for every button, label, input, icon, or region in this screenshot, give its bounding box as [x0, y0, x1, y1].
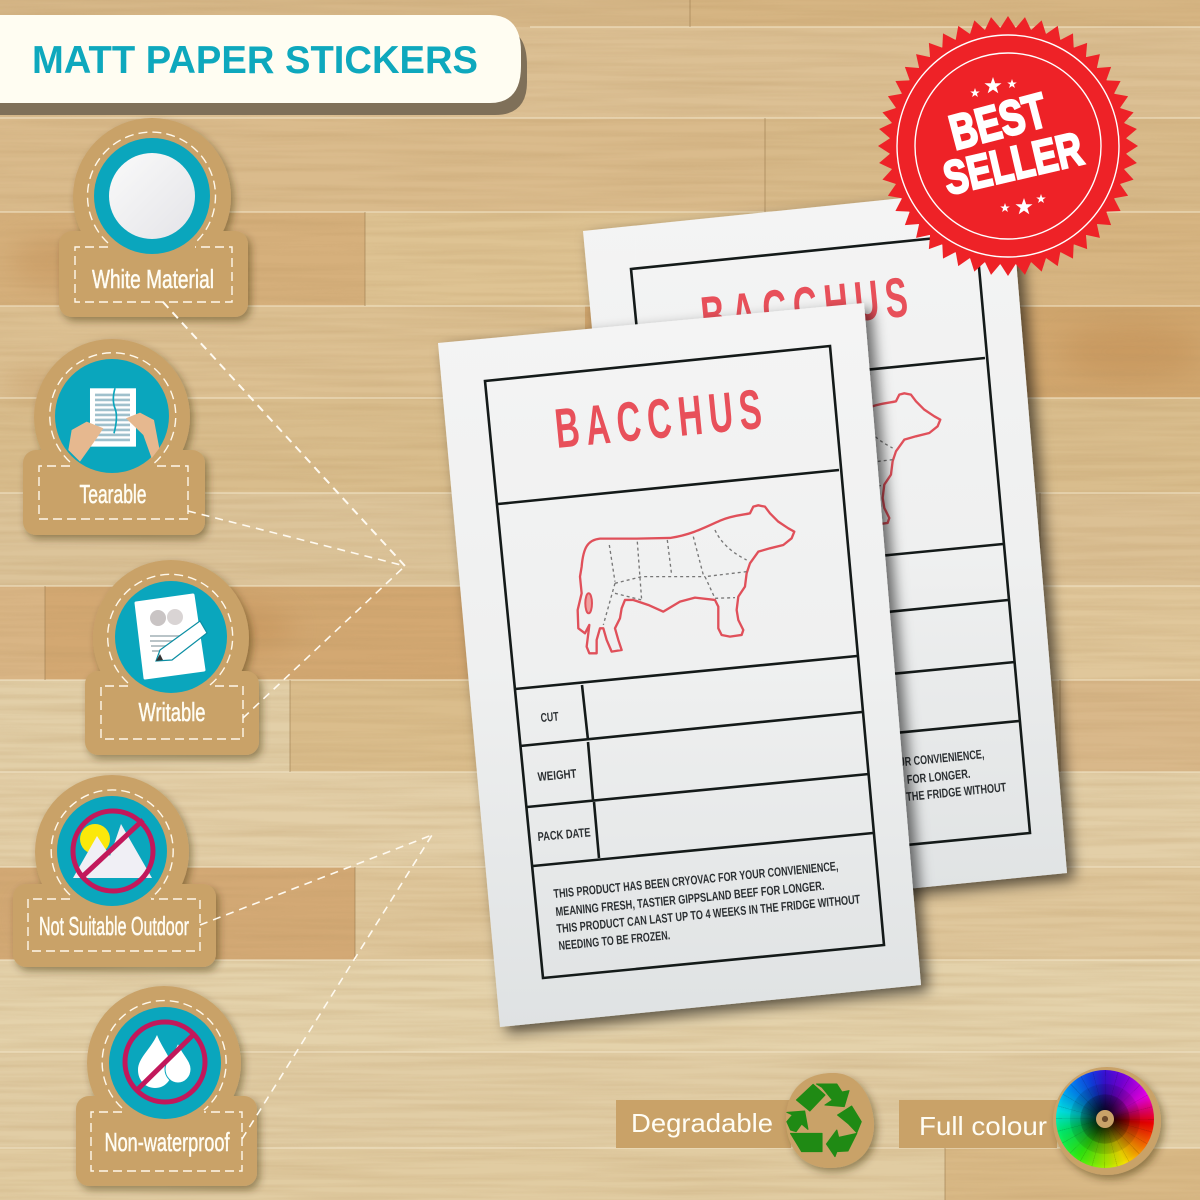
best seller text: SELLER [938, 121, 1088, 205]
badge: degradable [616, 1073, 874, 1168]
title text: MATT PAPER STICKERS [32, 39, 478, 82]
brand name: BACCHUS [552, 377, 764, 460]
icon: paper and pencil [136, 595, 207, 678]
icon: crossed-out mountains [73, 811, 153, 891]
badge: full colour bar [899, 1067, 1161, 1175]
icon: colour wheel [1056, 1070, 1154, 1168]
product description text: THIS PRODUCT HAS BEEN CRYOVAC FOR YOUR CONVIENIENCE, [553, 859, 839, 901]
icon: hands tearing paper [68, 388, 159, 462]
sticker: writable [85, 560, 259, 755]
label: Tearable [80, 479, 146, 509]
front sticker sheet [438, 303, 921, 1027]
back sticker sheet [583, 187, 1067, 915]
full colour label: Full colour [919, 1111, 1047, 1141]
sticker: tearable [23, 339, 205, 535]
back sticker sheet: BACCHUS [698, 265, 910, 348]
connector lines to the sheet [163, 302, 432, 1139]
icon: crossed-out water drops [125, 1022, 205, 1102]
label: Non-waterproof [104, 1127, 230, 1157]
best seller badge [878, 16, 1138, 276]
field label: pack date: PACK DATE [537, 825, 591, 844]
back sticker sheet: THIS PRODUCT CAN LAST UP TO 4 WEEKS IN THE FRIDGE WITHOUT [702, 780, 1007, 824]
field label: cut: CUT [540, 709, 559, 725]
stars [970, 77, 1046, 214]
sticker: non-waterproof [76, 986, 257, 1186]
best seller text [938, 84, 1088, 205]
sticker: not suitable outdoor [13, 775, 216, 967]
product description text: MEANING FRESH, TASTIER GIPPSLAND BEEF FOR LONGER. [555, 879, 825, 919]
product description text: NEEDING TO BE FROZEN. [558, 928, 671, 953]
label: Writable [138, 697, 206, 727]
title banner [0, 15, 527, 115]
icon: cow outline [578, 505, 794, 653]
best seller text: BEST [944, 84, 1053, 161]
back sticker sheet: MEANING FRESH, TASTIER GIPPSLAND BEEF FOR LONGER. [701, 767, 971, 807]
product description text: THIS PRODUCT CAN LAST UP TO 4 WEEKS IN THE FRIDGE WITHOUT [556, 892, 861, 936]
icon: white disc [109, 153, 195, 239]
icon: recycle arrows [787, 1084, 861, 1157]
product description text [553, 859, 861, 953]
sticker: white material [59, 118, 248, 317]
label: White Material [92, 264, 214, 294]
back sticker sheet: THIS PRODUCT HAS BEEN CRYOVAC FOR YOUR CONVIENIENCE, [699, 747, 985, 789]
degradable label: Degradable [631, 1108, 773, 1138]
label: Not Suitable Outdoor [39, 911, 189, 941]
field label: weight: WEIGHT [537, 767, 577, 784]
label frame and table lines [485, 346, 884, 978]
